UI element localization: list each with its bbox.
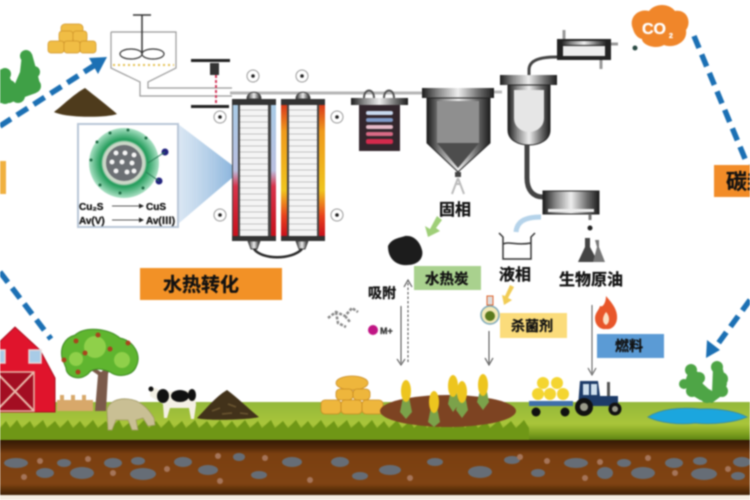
nanoparticle inset: Cu₂S xyxy=(79,202,104,213)
tractor and trailer xyxy=(529,377,622,416)
bactericide label xyxy=(500,313,567,338)
adsorption label: 吸附 xyxy=(368,285,396,301)
pipes to condensers xyxy=(527,57,557,197)
apple tree xyxy=(62,329,138,411)
biomass pile top-left xyxy=(54,88,117,117)
nanoparticle inset: CuS xyxy=(146,202,166,213)
cow xyxy=(148,386,196,419)
gauges xyxy=(214,70,343,221)
small dot near cloud xyxy=(632,46,638,50)
bactericide flask xyxy=(481,296,499,324)
pump / laser stand xyxy=(191,59,230,108)
hay bales on ground xyxy=(321,376,383,414)
nanoparticle inset: Av(V) xyxy=(79,216,105,227)
nanoparticle inset: Av(Ⅲ) xyxy=(146,216,175,227)
fuel label: 燃料 xyxy=(615,338,643,354)
left label box xyxy=(0,161,6,194)
upper condenser xyxy=(557,30,618,69)
CO2 cloud: 2 xyxy=(669,33,673,40)
fence xyxy=(57,395,93,411)
label: solid phase: 固相 xyxy=(439,201,471,219)
connecting tube between reactors xyxy=(254,249,302,257)
lower condenser xyxy=(543,191,599,230)
fuel label xyxy=(597,334,664,358)
manure pile on ground xyxy=(197,390,259,420)
arrow heads xyxy=(89,57,720,358)
stirred tank xyxy=(111,15,232,96)
pale liquid pipe xyxy=(516,217,541,232)
metal ion label: M+ xyxy=(380,326,393,336)
pollutant molecule xyxy=(328,308,358,327)
zoom cone xyxy=(178,124,232,224)
beaker xyxy=(499,233,535,259)
hydrochar label xyxy=(414,266,481,290)
solids collector xyxy=(422,88,494,194)
separator vessel xyxy=(494,75,557,145)
arrow to soil xyxy=(485,331,493,365)
hay bales top-left xyxy=(48,24,96,53)
hydrochar label: 水热炭 xyxy=(425,271,468,288)
process pipe xyxy=(230,92,424,94)
flame icon xyxy=(595,296,617,329)
hydrochar lump xyxy=(388,236,422,265)
adsorption arrows xyxy=(397,280,412,365)
reactor right xyxy=(281,92,325,249)
metal ion label xyxy=(368,325,393,336)
reactor left xyxy=(232,92,276,249)
green arrow xyxy=(425,216,442,237)
barn xyxy=(0,327,55,412)
soil bed with corn xyxy=(380,374,516,427)
CO2 cloud xyxy=(632,5,689,47)
right label: carbon xyxy=(714,165,750,197)
sheep xyxy=(107,399,155,430)
plant top-left xyxy=(0,50,41,104)
ground: soil layer with stones xyxy=(0,440,750,500)
ground: grass band xyxy=(0,402,750,442)
main label: hydrothermal conversion: 水热转化 xyxy=(163,274,239,296)
nanoparticle inset xyxy=(78,124,178,227)
oil flasks xyxy=(578,238,605,262)
liquid phase label: 液相 xyxy=(499,266,531,284)
heat exchanger xyxy=(351,90,408,151)
cycle arrows xyxy=(0,36,750,345)
main label: hydrothermal conversion xyxy=(140,268,282,300)
plant by pond xyxy=(679,361,728,403)
bactericide label: 杀菌剂 xyxy=(511,318,553,334)
arrow to tractor xyxy=(588,305,596,375)
pond xyxy=(648,408,747,424)
yellow arrow xyxy=(502,285,514,305)
bio-crude label: 生物原油 xyxy=(559,271,623,289)
CO2 cloud: CO xyxy=(642,21,666,38)
